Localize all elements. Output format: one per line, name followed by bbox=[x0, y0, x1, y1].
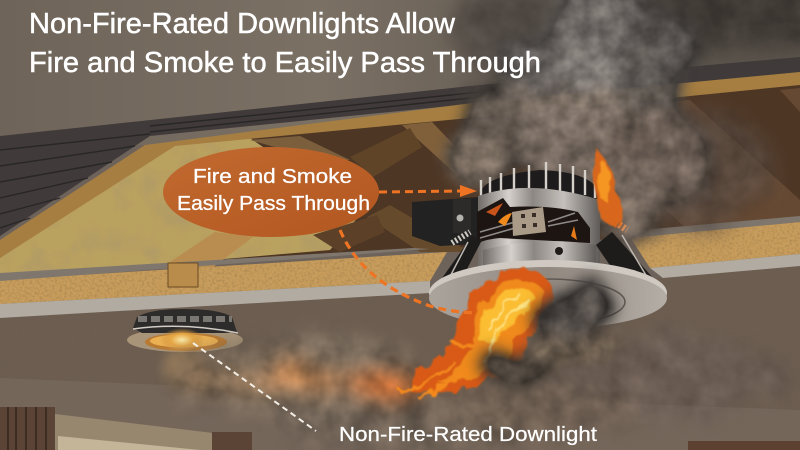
roof trusses bbox=[170, 122, 478, 277]
lower collar bbox=[483, 241, 596, 268]
spring clips bbox=[430, 217, 662, 298]
dashed curve arrow to trim bbox=[340, 230, 476, 313]
title: Fire and Smoke to Easily Pass Through bbox=[29, 47, 541, 79]
background haze bbox=[0, 0, 800, 145]
callout oval bbox=[163, 147, 379, 237]
fixture body bbox=[478, 188, 600, 268]
trim plate bbox=[429, 260, 667, 326]
window and curtains on wall bbox=[0, 407, 800, 450]
open cavity bbox=[477, 198, 590, 245]
right attic lit panels bbox=[560, 88, 800, 232]
attic interior wood bbox=[150, 84, 800, 262]
terminal block bbox=[512, 207, 546, 236]
callout oval: Easily Pass Through bbox=[177, 192, 370, 215]
junction box bbox=[412, 197, 480, 246]
rear fire on fixture bbox=[594, 150, 622, 226]
insulation bbox=[0, 138, 360, 275]
title: Non-Fire-Rated Downlights Allow bbox=[29, 8, 455, 40]
smoke in front of trim plate bbox=[482, 280, 630, 382]
title bbox=[29, 8, 541, 79]
ceiling plaster bbox=[0, 264, 800, 410]
smoke spreading along ceiling bbox=[162, 335, 790, 450]
white ceiling edge bbox=[0, 254, 800, 318]
callout oval: Fire and Smoke bbox=[193, 165, 352, 188]
large downlight fixture bbox=[412, 162, 667, 329]
roof shingles bbox=[0, 57, 800, 236]
big smoke plume behind fixture bbox=[455, 0, 800, 230]
leader line to small downlight bbox=[193, 343, 316, 431]
wiring and flame in cavity bbox=[480, 203, 578, 240]
arrow to fixture body bbox=[379, 185, 477, 197]
top cap of ceiling bbox=[0, 216, 800, 281]
lower wall bbox=[0, 378, 800, 450]
heat sink fins bbox=[480, 162, 600, 215]
small non-fire-rated downlight bbox=[127, 309, 243, 388]
joist block bbox=[168, 263, 198, 287]
downlight label: Non-Fire-Rated Downlight bbox=[339, 423, 597, 446]
OSB board right bbox=[630, 222, 800, 268]
OSB board left bbox=[0, 252, 447, 304]
roof fascia board bbox=[0, 72, 800, 258]
main fire under fixture bbox=[400, 268, 552, 400]
